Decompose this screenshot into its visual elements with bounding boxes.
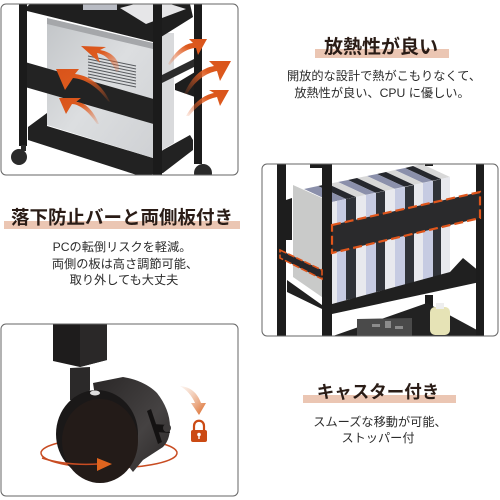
description: 放熱性が良い、CPU に優しい。 xyxy=(294,85,470,100)
caster leg xyxy=(53,324,107,400)
lower shelf and bottle xyxy=(333,295,480,336)
description: 開放的な設計で熱がこもりなくて、 xyxy=(287,68,481,83)
rotation ring back xyxy=(40,442,178,468)
description xyxy=(52,239,198,287)
description: 両側の板は高さ調節可能、 xyxy=(52,257,198,271)
bottom shelf xyxy=(28,113,193,176)
left guard bar with dashed outline xyxy=(280,250,322,279)
PC case xyxy=(47,18,174,158)
heading: 放熱性が良い xyxy=(324,35,438,58)
arrows through the case xyxy=(56,46,119,124)
icon: padlock xyxy=(191,421,207,442)
description: 取り外しても大丈夫 xyxy=(70,273,178,287)
heading: キャスター付き xyxy=(317,382,439,402)
panel: ventilation photo xyxy=(1,4,238,182)
panel: caster text xyxy=(303,382,456,445)
shelf xyxy=(287,258,480,314)
right side bar and board xyxy=(162,59,194,97)
casters xyxy=(11,145,212,174)
description: PCの転倒リスクを軽減。 xyxy=(53,239,191,254)
front guard bar with dashed outline xyxy=(332,192,480,253)
heading: 落下防止バーと両側板付き xyxy=(11,207,233,228)
wheel hub opening xyxy=(90,390,100,396)
heading underline xyxy=(315,49,449,58)
description xyxy=(313,414,447,445)
heading underline xyxy=(4,221,240,229)
description xyxy=(287,68,481,100)
panel: caster photo xyxy=(1,324,238,496)
wheel rim xyxy=(56,390,138,468)
heading underline xyxy=(303,395,456,403)
panel: guard bar text xyxy=(4,207,240,287)
panel: heat dissipation text xyxy=(287,35,481,100)
book tops xyxy=(304,164,450,202)
frame posts xyxy=(19,4,202,176)
top shelf with books xyxy=(23,4,193,42)
description: スムーズな移動が可能、 xyxy=(313,414,447,429)
description: ストッパー付 xyxy=(341,431,415,445)
icon: stopper down arrow xyxy=(180,386,206,415)
wheel drum xyxy=(93,377,170,472)
frame posts xyxy=(277,164,484,336)
panel: guard bar photo xyxy=(262,164,498,336)
wheel front disc xyxy=(62,399,138,483)
left book cover xyxy=(293,185,322,297)
book spines xyxy=(332,177,450,304)
brake lever xyxy=(147,409,171,444)
front guard bar xyxy=(25,62,157,125)
rotation arrow xyxy=(42,458,112,471)
